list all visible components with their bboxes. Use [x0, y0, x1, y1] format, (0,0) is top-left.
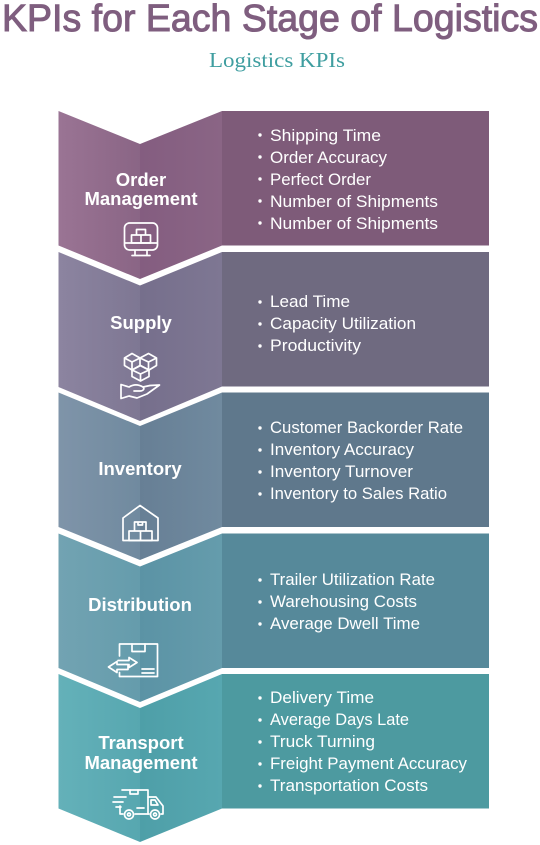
list: transport management KPIs: Truck Turning — [270, 733, 375, 751]
list: distribution KPIs: Trailer Utilization Rate — [270, 571, 435, 589]
list: transport management KPIs: Transportation Costs — [270, 777, 428, 795]
panel: inventory — [58, 392, 489, 560]
heading: supply: Supply — [110, 312, 173, 333]
icon: warehouse — [123, 506, 158, 540]
list: distribution KPIs: Warehousing Costs — [270, 593, 417, 611]
heading: inventory: Inventory — [98, 458, 182, 479]
heading: order management: Order — [116, 169, 166, 190]
list: transport management KPIs: Freight Payment Accuracy — [270, 755, 468, 773]
icon: parcel with arrows — [108, 644, 158, 676]
panel: distribution — [58, 534, 489, 702]
icon: delivery truck — [113, 790, 163, 819]
list: order management KPIs — [258, 127, 438, 233]
list: inventory KPIs: Inventory Accuracy — [270, 441, 415, 459]
heading: transport management: Management — [84, 752, 198, 773]
subtitle: Logistics KPIs — [209, 48, 345, 72]
list: order management KPIs: Order Accuracy — [270, 149, 388, 167]
heading: order management: Management — [84, 188, 198, 209]
list: supply KPIs — [258, 293, 416, 355]
list: distribution KPIs — [258, 571, 435, 633]
list: inventory KPIs: Customer Backorder Rate — [270, 419, 463, 437]
list: supply KPIs: Lead Time — [270, 293, 350, 311]
list: distribution KPIs: Average Dwell Time — [270, 615, 420, 633]
list: transport management KPIs — [258, 689, 468, 795]
panel: transport management — [58, 674, 489, 842]
list: supply KPIs: Capacity Utilization — [270, 315, 416, 333]
heading: transport management: Transport — [98, 732, 184, 753]
panel: supply — [58, 252, 489, 421]
list: inventory KPIs: Inventory to Sales Ratio — [270, 485, 447, 503]
list: order management KPIs: Shipping Time — [270, 127, 381, 145]
heading: distribution: Distribution — [88, 594, 192, 615]
list: transport management KPIs: Average Days Late — [270, 711, 409, 729]
icon: boxes on hand — [121, 354, 160, 398]
list: transport management KPIs: Delivery Time — [270, 689, 374, 707]
list: inventory KPIs — [258, 419, 463, 503]
list: order management KPIs: Perfect Order — [270, 171, 372, 189]
icon: monitor with boxes — [124, 223, 158, 256]
panel: order management — [58, 111, 489, 279]
list: order management KPIs: Number of Shipments — [270, 193, 438, 211]
list: inventory KPIs: Inventory Turnover — [270, 463, 414, 481]
list: order management KPIs: Number of Shipments — [270, 215, 438, 233]
list: supply KPIs: Productivity — [270, 337, 362, 355]
